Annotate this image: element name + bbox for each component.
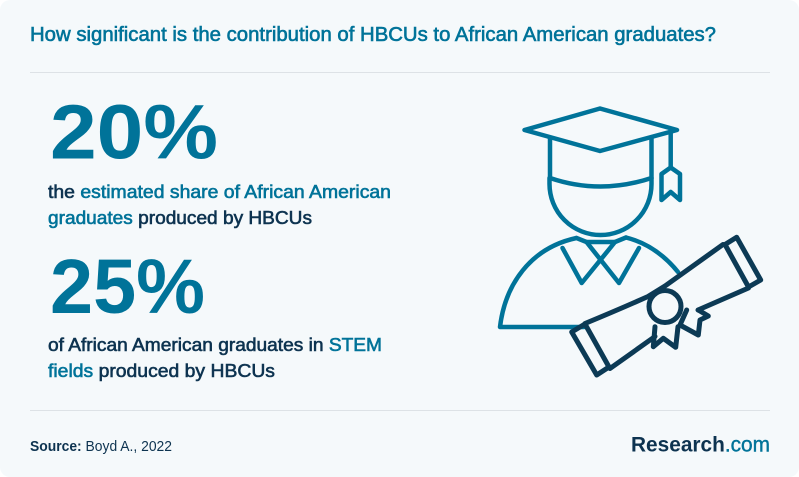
icon: graduate with diploma — [500, 108, 761, 375]
text block: 25% description: of African American graduates in STEM — [48, 334, 382, 355]
statistic: 25%: 25% — [50, 244, 205, 330]
logo: Research.com: Research.com — [631, 434, 770, 456]
text block: 20% description: the estimated share of African American — [48, 181, 391, 202]
text block: 20% description — [48, 181, 391, 228]
text block: 20% description: graduates produced by HBCUs — [48, 207, 312, 228]
text block: 25% description — [48, 334, 382, 381]
source note: Source: Boyd A., 2022 — [30, 439, 172, 455]
icon: diploma scroll — [572, 237, 761, 375]
icon: seal rosette — [649, 290, 681, 322]
text block: 25% description: fields produced by HBCUs — [48, 360, 275, 381]
icon: graduate figure — [500, 108, 680, 327]
statistic: 20%: 20% — [50, 90, 218, 176]
title: How significant is the contribution of HBCUs to African American graduates? — [30, 24, 716, 46]
